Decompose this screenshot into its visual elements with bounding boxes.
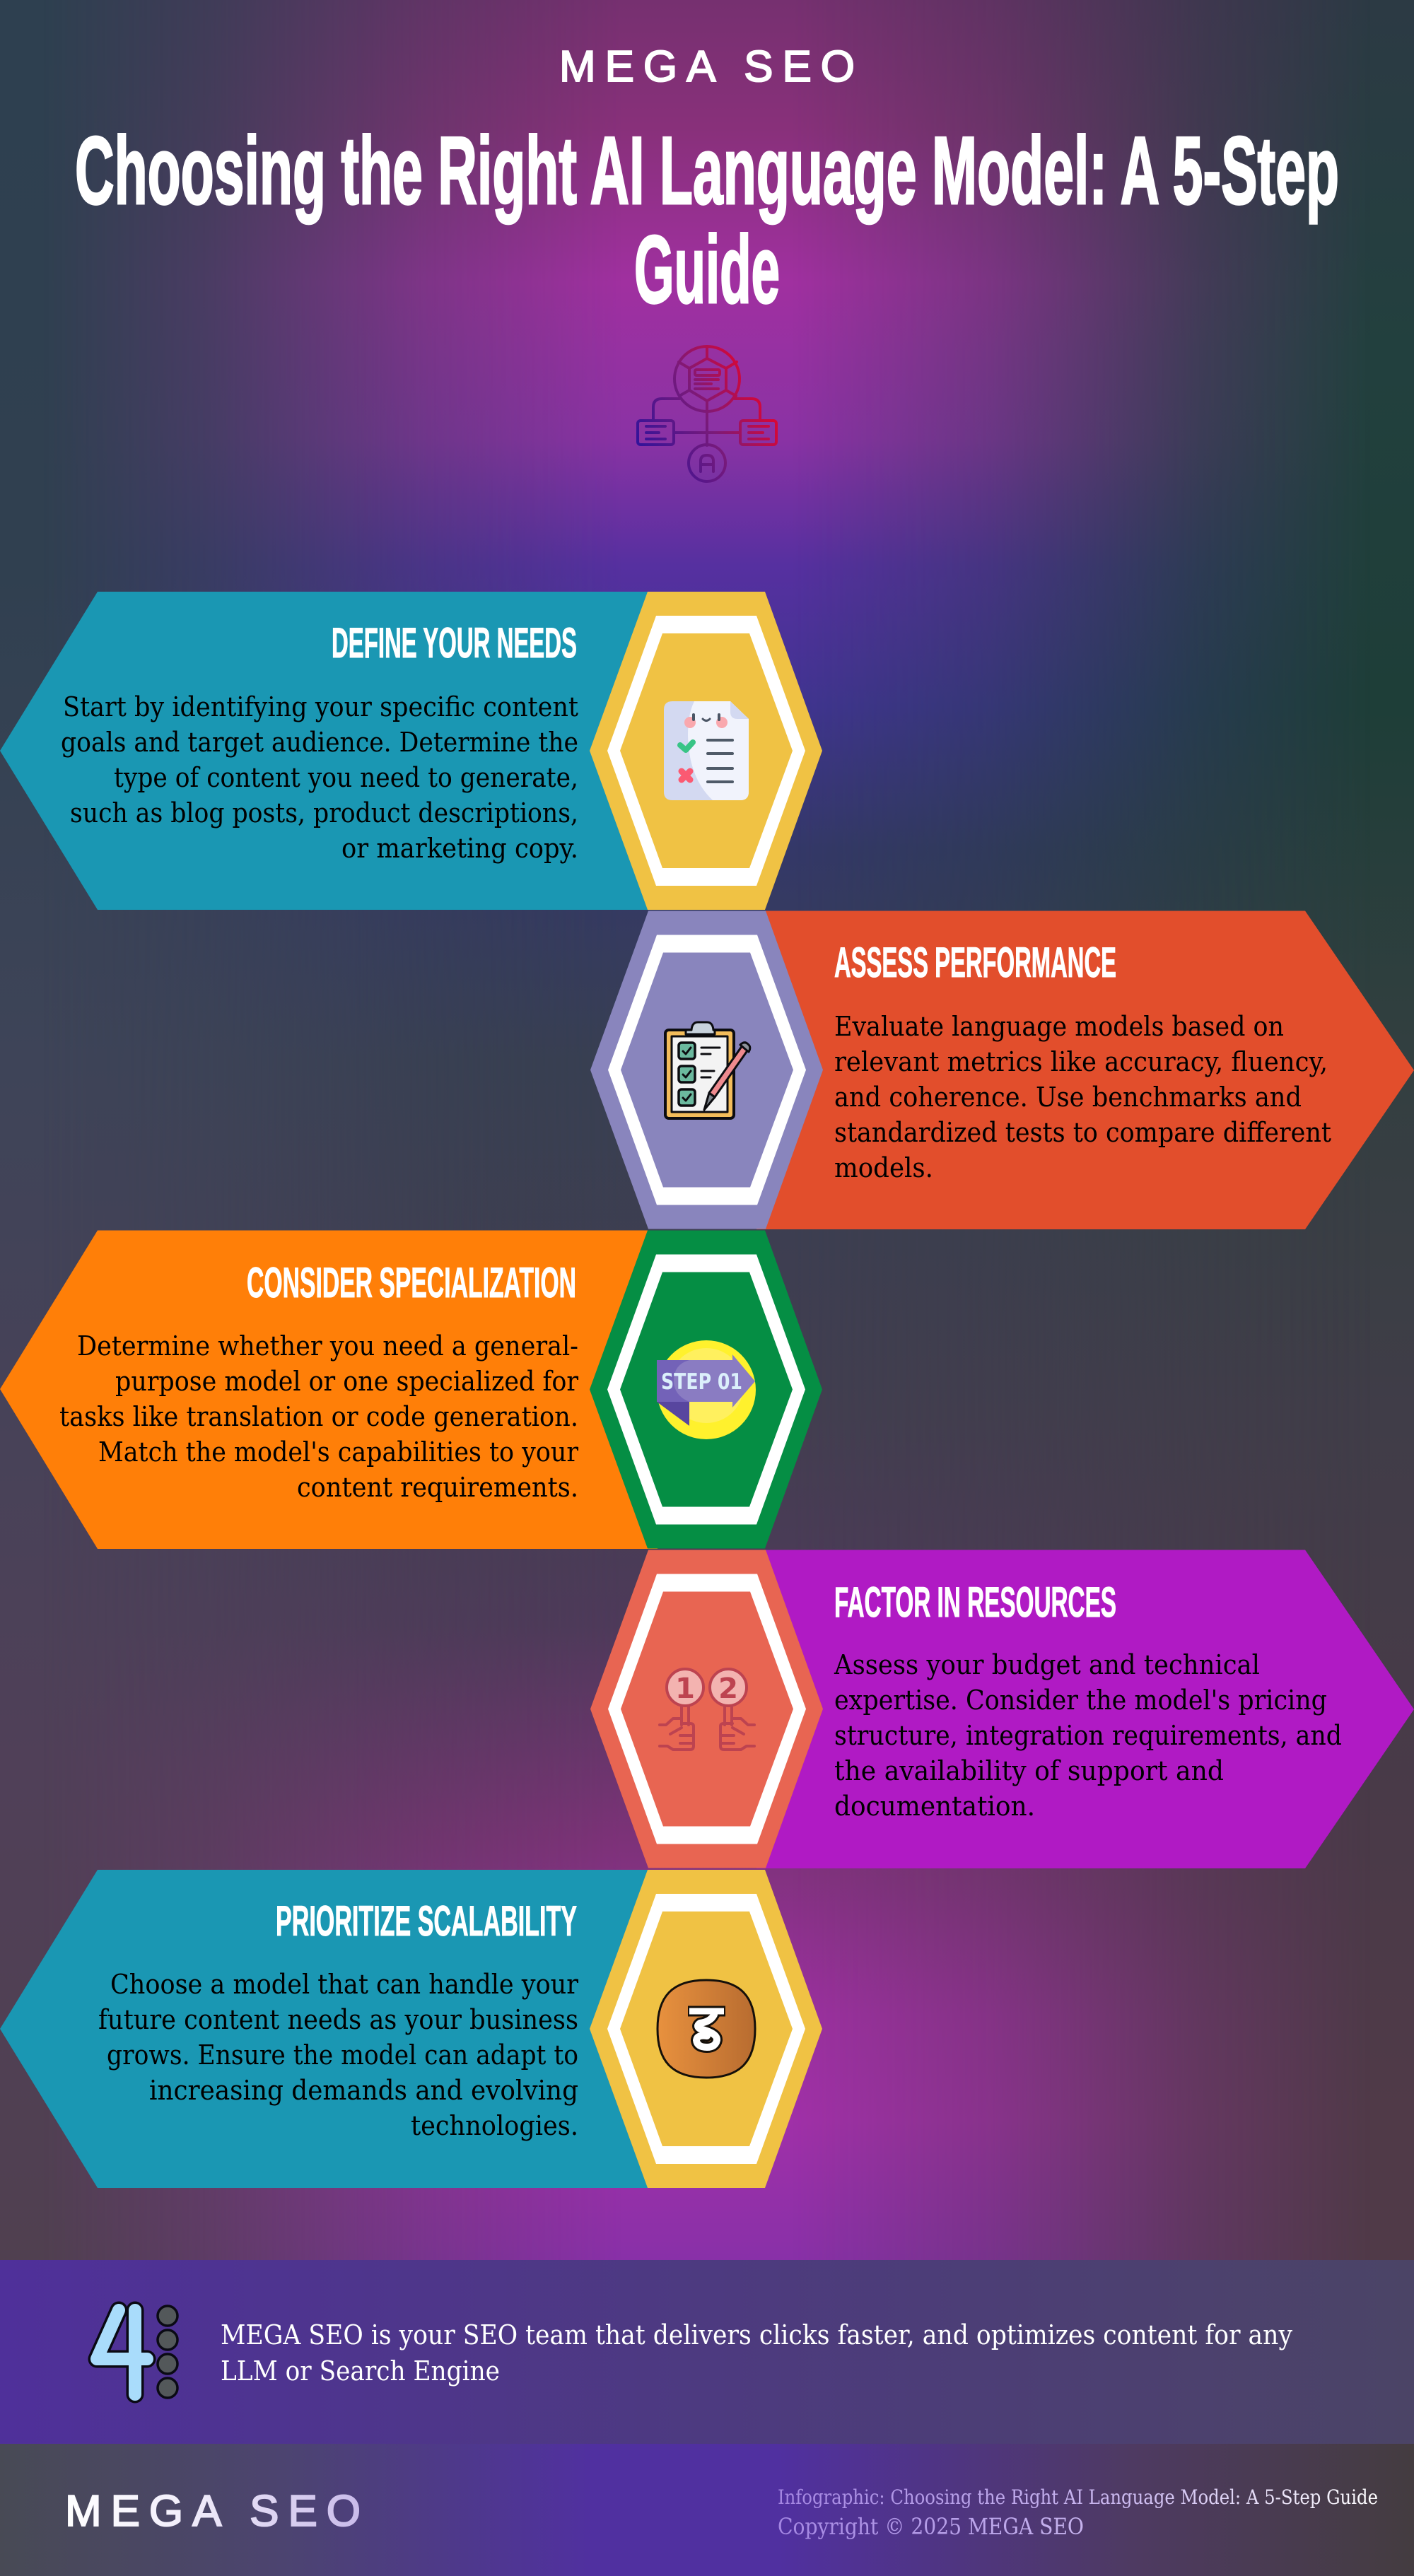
body text: such as blog posts, product descriptions, bbox=[70, 797, 578, 829]
body text: type of content you need to generate, bbox=[114, 762, 578, 793]
body text: increasing demands and evolving bbox=[149, 2075, 578, 2106]
banner bbox=[756, 1550, 1414, 1868]
body text: relevant metrics like accuracy, fluency, bbox=[834, 1046, 1328, 1077]
body text: or marketing copy. bbox=[341, 833, 578, 864]
banner bbox=[0, 1870, 658, 2188]
body text bbox=[834, 1011, 1331, 1183]
body text bbox=[59, 1330, 579, 1503]
footer logo: MEGA SEO bbox=[65, 2487, 361, 2536]
icon: step 01 arrow: STEP 01 bbox=[661, 1369, 742, 1395]
promo text bbox=[221, 2319, 1292, 2387]
hexagon bbox=[590, 1870, 822, 2188]
body text: Evaluate language models based on bbox=[834, 1011, 1284, 1042]
promo text: MEGA SEO is your SEO team that delivers clicks faster, and optimizes content for any bbox=[221, 2319, 1292, 2350]
title: Guide bbox=[634, 216, 780, 323]
icon: checklist document bbox=[664, 701, 749, 800]
body text bbox=[61, 691, 578, 864]
panel: prioritize scalability bbox=[0, 1870, 822, 2188]
hexagon bbox=[590, 592, 822, 910]
hexagon bbox=[590, 1550, 823, 1868]
panel: consider specialization bbox=[0, 1230, 822, 1549]
body text: technologies. bbox=[411, 2110, 578, 2141]
body text: Choose a model that can handle your bbox=[110, 1969, 579, 2000]
icon: step 01 arrow bbox=[657, 1340, 756, 1439]
icon: hands holding number signs bbox=[660, 1669, 754, 1750]
body text: Start by identifying your specific content bbox=[63, 691, 578, 722]
body text: purpose model or one specialized for bbox=[115, 1366, 579, 1397]
body text: structure, integration requirements, and bbox=[834, 1720, 1342, 1751]
body text: future content needs as your business bbox=[98, 2004, 578, 2035]
body text: goals and target audience. Determine the bbox=[61, 727, 578, 758]
icon: rounded badge bbox=[658, 1980, 755, 2078]
hexagon bbox=[590, 1230, 822, 1548]
body text bbox=[834, 1649, 1342, 1822]
footer credits bbox=[778, 2486, 1378, 2540]
footer bbox=[0, 2444, 1414, 2576]
heading: CONSIDER SPECIALIZATION bbox=[247, 1259, 576, 1306]
panel: define your needs bbox=[0, 592, 822, 910]
panel: assess performance bbox=[590, 911, 1414, 1229]
body text: and coherence. Use benchmarks and bbox=[834, 1082, 1302, 1113]
body text: standardized tests to compare different bbox=[834, 1117, 1331, 1148]
body text bbox=[98, 1969, 579, 2141]
body text: grows. Ensure the model can adapt to bbox=[107, 2039, 578, 2071]
hexagon bbox=[590, 911, 823, 1229]
heading: PRIORITIZE SCALABILITY bbox=[276, 1897, 577, 1945]
heading: FACTOR IN RESOURCES bbox=[834, 1579, 1116, 1626]
promo band bbox=[0, 2260, 1414, 2444]
title bbox=[75, 117, 1339, 323]
body text: documentation. bbox=[834, 1791, 1035, 1822]
body text: expertise. Consider the model's pricing bbox=[834, 1685, 1327, 1716]
body text: models. bbox=[834, 1152, 933, 1183]
banner bbox=[0, 592, 658, 910]
icon: hands holding number signs: 1 bbox=[675, 1673, 695, 1705]
icon: hands holding number signs: 2 bbox=[718, 1673, 738, 1705]
body text: the availability of support and bbox=[834, 1755, 1224, 1786]
icon: clipboard and pencil bbox=[665, 1022, 750, 1118]
body text: content requirements. bbox=[297, 1472, 578, 1503]
body text: Match the model's capabilities to your bbox=[98, 1436, 579, 1468]
body text: Assess your budget and technical bbox=[834, 1649, 1260, 1680]
panel: factor in resources bbox=[590, 1550, 1414, 1868]
promo text: LLM or Search Engine bbox=[221, 2355, 500, 2387]
heading: ASSESS PERFORMANCE bbox=[834, 939, 1116, 986]
banner bbox=[756, 911, 1414, 1229]
top logo: MEGA SEO bbox=[559, 42, 855, 91]
body text: tasks like translation or code generation. bbox=[59, 1401, 578, 1432]
heading: DEFINE YOUR NEEDS bbox=[332, 619, 577, 667]
banner bbox=[0, 1230, 658, 1549]
icon: AI language model network bbox=[638, 346, 776, 481]
body text: Determine whether you need a general- bbox=[77, 1330, 578, 1362]
icon: number four with dots bbox=[97, 2306, 177, 2398]
footer credits: Copyright © 2025 MEGA SEO bbox=[778, 2513, 1084, 2540]
